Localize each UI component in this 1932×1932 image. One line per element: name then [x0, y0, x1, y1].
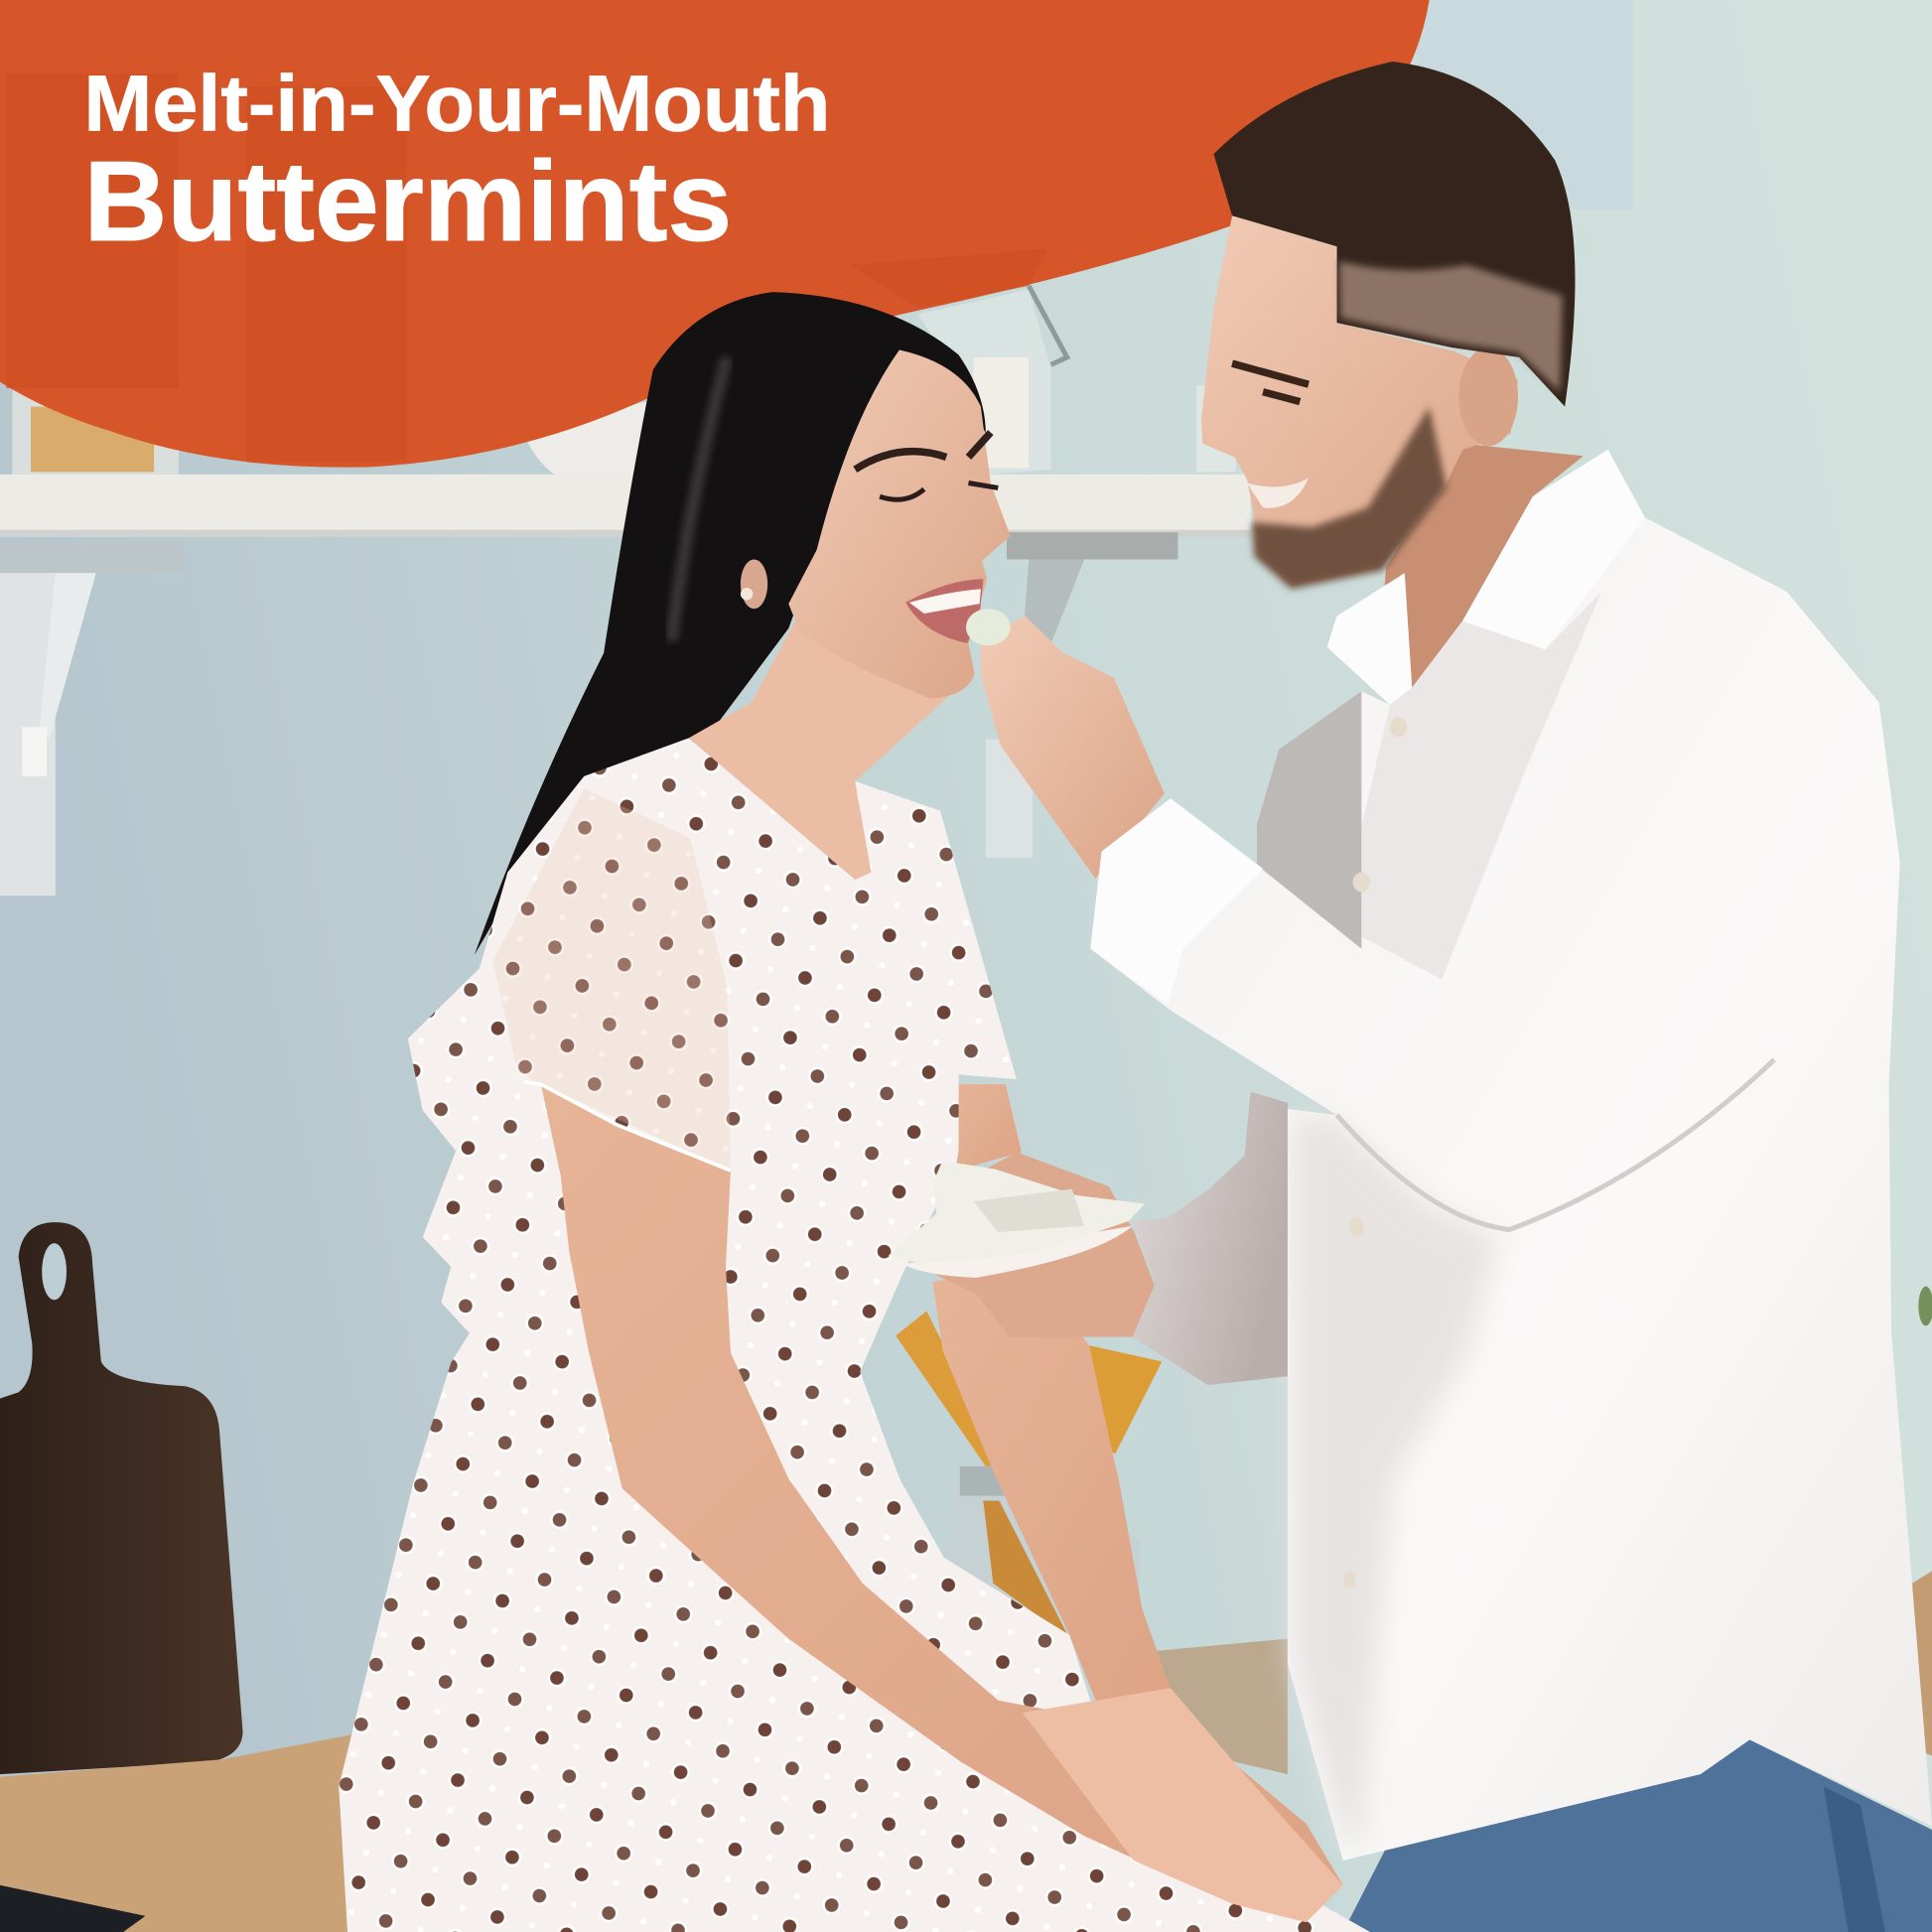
shirt sleeve crease	[1337, 1059, 1774, 1230]
man face	[1201, 215, 1518, 587]
shelf jar	[918, 286, 1067, 475]
wooden counter far right	[1912, 1571, 1932, 1756]
woman hair	[475, 292, 986, 955]
left shelf bracket	[0, 542, 185, 896]
shirt placket	[1361, 592, 1601, 980]
stove top	[0, 1885, 145, 1932]
woman earring	[741, 588, 753, 600]
left jar on shelf	[12, 369, 179, 475]
wrapped candies	[889, 1161, 1145, 1263]
shirt under sleeve shading	[1294, 1115, 1497, 1849]
woman far upper arm	[956, 1084, 1022, 1171]
man smile	[1247, 479, 1309, 508]
man neck	[1380, 444, 1584, 690]
shirt buttons	[1343, 717, 1407, 1588]
cutting board	[0, 1222, 242, 1774]
woman mouth	[905, 579, 983, 643]
woman hand on knee	[1023, 1688, 1343, 1922]
man hair	[1213, 62, 1576, 407]
shirt grey chest	[1257, 691, 1361, 949]
orange title blob	[0, 0, 1430, 468]
title: Melt-in-Your-Mouth	[83, 60, 830, 148]
buttermint in fingers	[966, 609, 1011, 645]
woman neck	[689, 622, 949, 880]
wooden counter right	[1155, 1639, 1288, 1774]
woman far forearm	[932, 1269, 1182, 1716]
man beard	[1252, 407, 1447, 589]
title	[83, 60, 830, 265]
woman ear	[741, 559, 767, 609]
man hair fade	[1339, 261, 1563, 392]
right shelf bracket	[986, 532, 1177, 858]
bowl on shelf	[523, 400, 653, 475]
title: Buttermints	[83, 139, 732, 265]
shelf right jar	[1196, 385, 1236, 472]
shirt right collar	[1462, 450, 1645, 649]
man shirt	[1090, 450, 1932, 1861]
woman face	[788, 349, 1011, 699]
plate of buttermints	[889, 1161, 1145, 1278]
plant leaf	[1918, 1287, 1932, 1325]
man eye and brow	[1232, 363, 1309, 402]
man ear	[1458, 347, 1518, 446]
shelf	[0, 475, 1251, 537]
man jeans	[1343, 1739, 1932, 1932]
wooden counter left	[0, 1734, 456, 1932]
dress sleeve hem	[523, 1082, 731, 1171]
woman	[339, 292, 1370, 1932]
man cuff	[1090, 798, 1263, 1004]
spaghetti jar	[896, 1311, 1162, 1651]
woman eyebrow	[855, 433, 991, 470]
dress sheer sleeve tint	[492, 788, 731, 1171]
man	[1090, 62, 1932, 1932]
woman dress	[339, 738, 1370, 1932]
woman eyes	[880, 483, 998, 499]
man feeding hand	[981, 617, 1165, 879]
man far sleeve	[1133, 1092, 1288, 1385]
shirt left collar	[1327, 573, 1412, 705]
pasta in jar	[31, 407, 154, 472]
man hand holding plate	[936, 1152, 1155, 1337]
woman hair highlight	[671, 357, 727, 640]
woman near arm	[541, 1084, 1343, 1922]
jars seen through blob	[6, 73, 1047, 462]
